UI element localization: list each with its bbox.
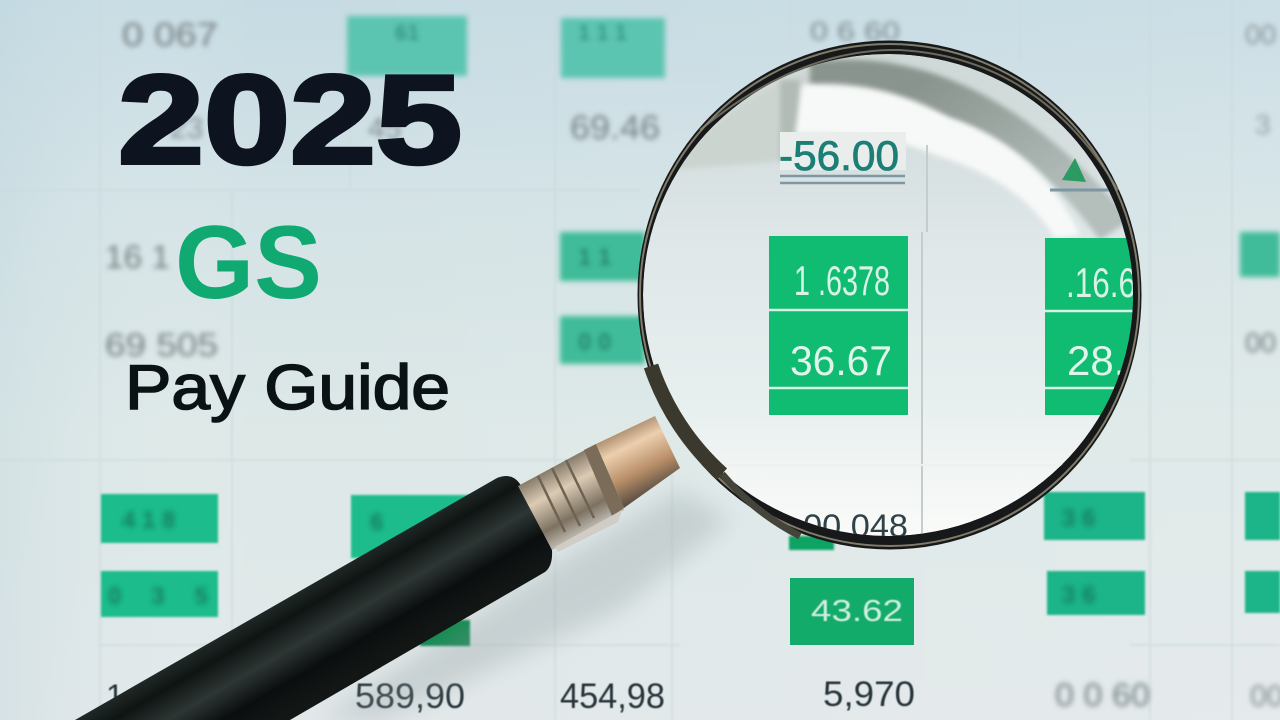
magnifying glass bbox=[75, 40, 1149, 720]
table: bottom row of values: 589,90 bbox=[355, 677, 465, 716]
lens: magnified right green cell bbox=[1045, 238, 1133, 415]
table: second row of blurred values: 45 bbox=[368, 112, 401, 145]
table: third and fourth row cells: 1 1 bbox=[578, 244, 611, 271]
table: bottom row of values: 0 0 60 bbox=[1055, 677, 1150, 713]
infographic canvas: 3 6 bbox=[1062, 582, 1095, 609]
table: second row of blurred values bbox=[170, 109, 1271, 147]
green cell: 43.62 bbox=[790, 578, 914, 645]
infographic canvas: 3 6 bbox=[1062, 505, 1095, 532]
icon: handle collar bbox=[651, 366, 800, 536]
lens: magnified right icon bbox=[1050, 158, 1110, 190]
lens reflective edge bbox=[700, 50, 1118, 190]
table: second row of blurred values: 23 bbox=[170, 112, 203, 145]
handle cast shadow bbox=[320, 490, 730, 720]
lens: magnified value -56.00: -56.00 bbox=[779, 132, 899, 179]
infographic canvas: 6 bbox=[370, 509, 383, 536]
title: Pay Guide: Pay Guide bbox=[125, 353, 450, 423]
table: second row of blurred values: 3 bbox=[1255, 109, 1271, 140]
infographic canvas: 0 3 5 bbox=[108, 583, 208, 610]
lens: magnified clipped value at bottom: 00.048 bbox=[803, 508, 908, 544]
table: bottom row of values: 1 bbox=[106, 678, 124, 714]
table: top row of blurred cells: 0 6 60 bbox=[810, 16, 900, 46]
table: second row of blurred values: 69.46 bbox=[570, 109, 660, 147]
lens: magnified green table cell bbox=[769, 236, 909, 415]
lens: magnified green table cell: 36.67 bbox=[790, 337, 892, 384]
table: third and fourth row cells: 16 1 bbox=[105, 239, 170, 275]
green cell: 43.62: 43.62 bbox=[811, 593, 903, 628]
table: bottom row of values bbox=[106, 675, 1280, 716]
lens: top shadow and reflection bbox=[670, 56, 1130, 240]
icon: metal ferrule bbox=[518, 416, 680, 552]
lens: magnified right green cell: 28.5 bbox=[1067, 337, 1149, 384]
infographic canvas: 4 1 8 bbox=[122, 507, 175, 534]
title: GS: GS bbox=[175, 205, 322, 321]
table: fifth and sixth row cells bbox=[101, 492, 1280, 646]
lens: magnified right green cell: .16.6 bbox=[1066, 259, 1136, 306]
table: top row of blurred cells: 61 bbox=[395, 20, 419, 45]
table: bottom row of values: 5,970 bbox=[823, 675, 915, 714]
icon: black handle bbox=[75, 476, 552, 720]
table: third and fourth row cells: 00 bbox=[1245, 327, 1276, 358]
table: third and fourth row cells bbox=[105, 232, 1280, 364]
table: top row of blurred cells: 1 1 1 bbox=[578, 20, 627, 45]
table: top row of blurred cells: 00 bbox=[1245, 19, 1276, 50]
lens rim bbox=[638, 40, 1142, 550]
lens: column divider bbox=[922, 145, 927, 540]
table: bottom row of values: 454,98 bbox=[560, 677, 665, 716]
title: 2025: 2025 bbox=[118, 49, 462, 190]
table: third and fourth row cells: 0 0 bbox=[578, 329, 611, 356]
lens glass bbox=[640, 54, 1149, 544]
table: top row of blurred cells: 0 067 bbox=[122, 16, 218, 53]
table: top row of blurred cells bbox=[122, 16, 1276, 78]
table: third and fourth row cells: 69 505 bbox=[105, 327, 218, 363]
lens: magnified green table cell: 1 .6378 bbox=[794, 257, 890, 304]
